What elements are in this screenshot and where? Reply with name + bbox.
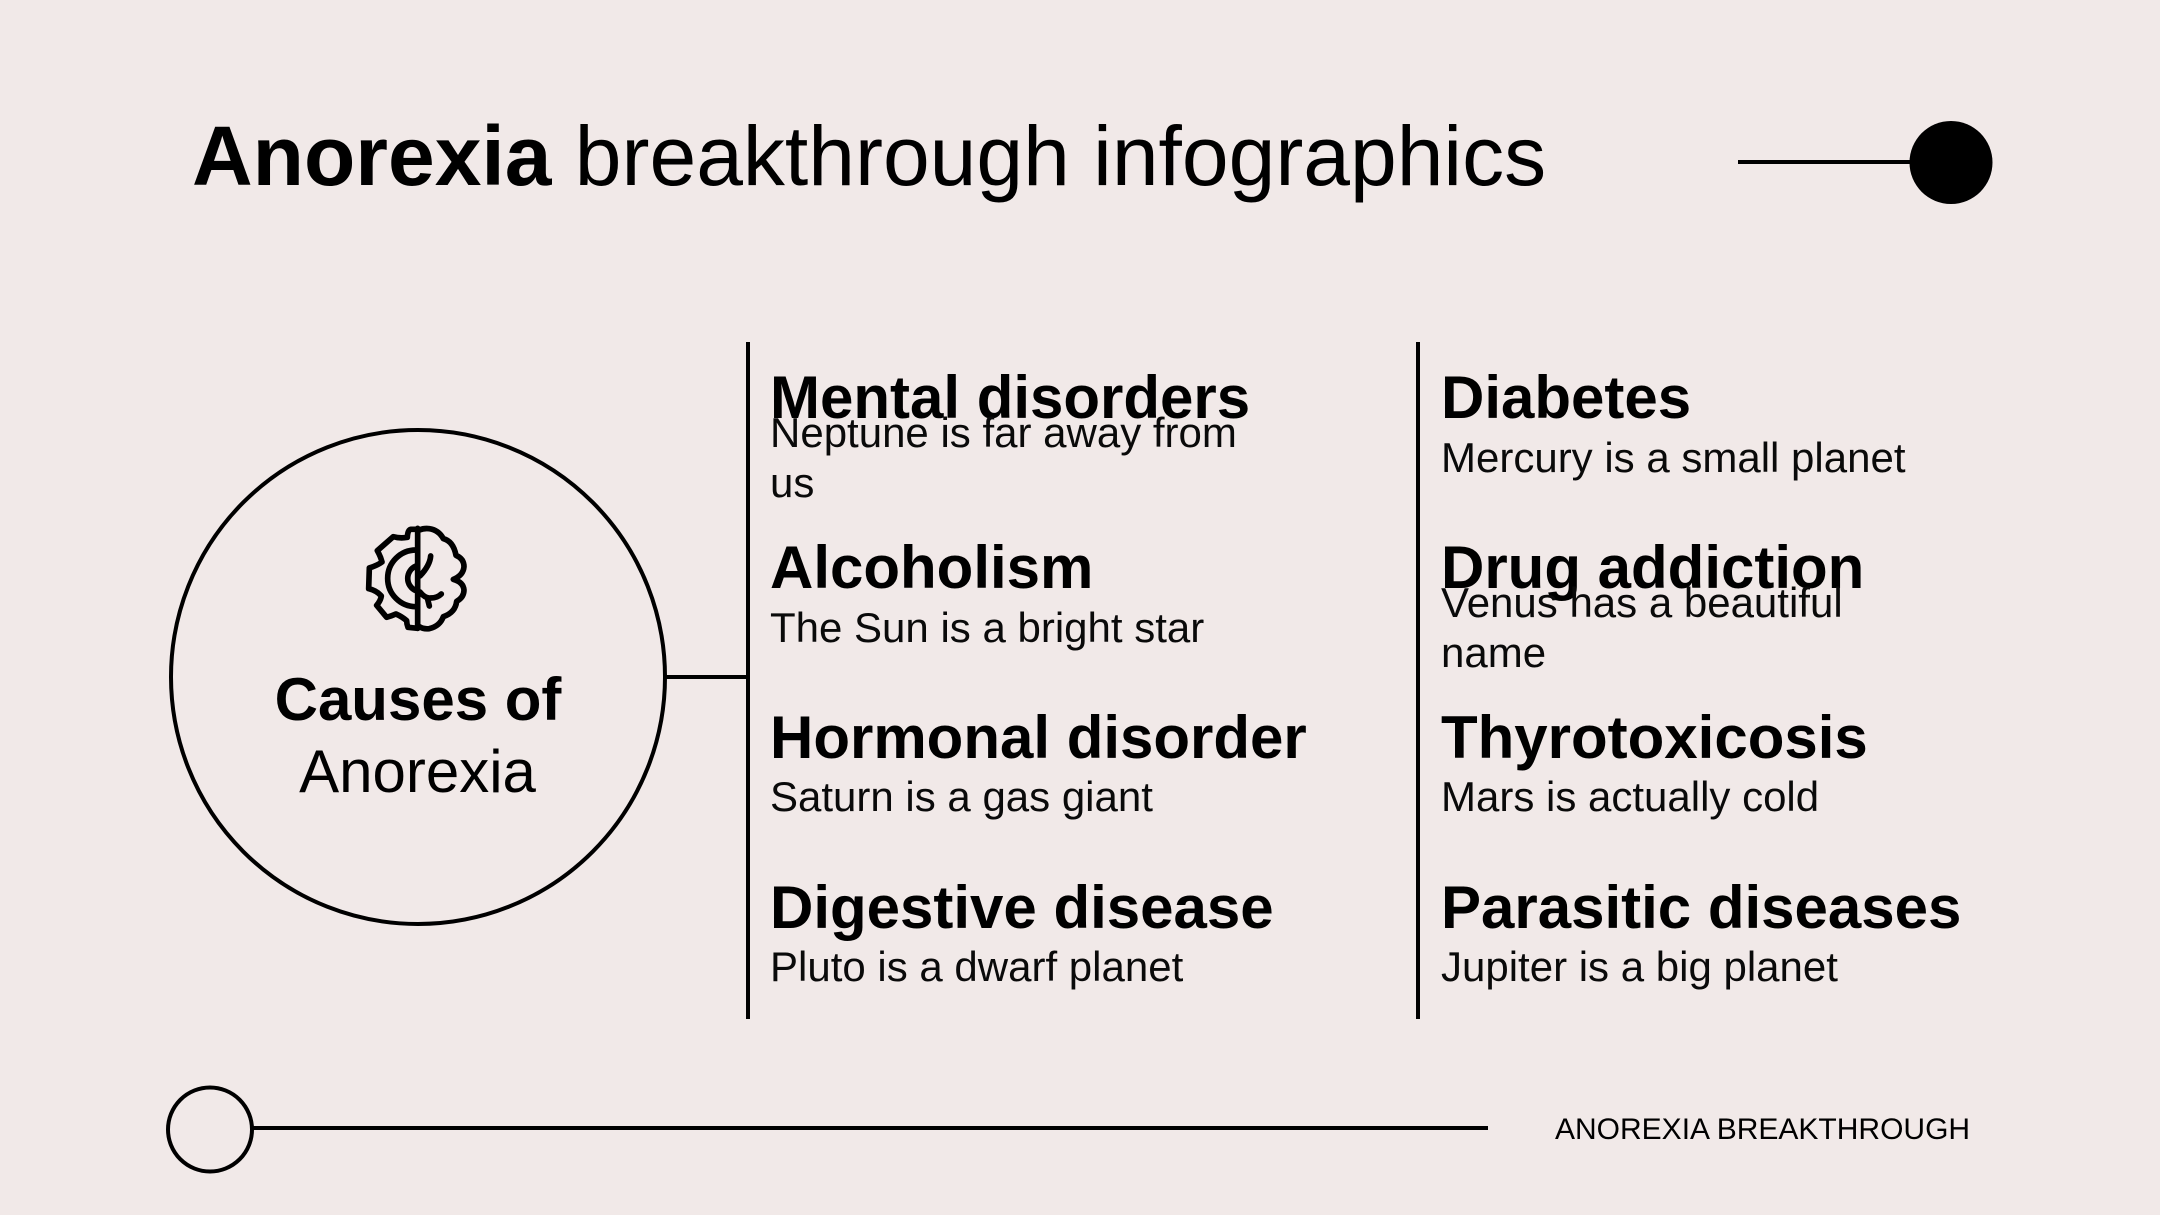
title: Anorexia breakthrough infographics	[192, 109, 1546, 203]
item: parasitic diseases: Jupiter is a big planet	[1441, 943, 1838, 990]
item: mental disorders: Mental disorders	[770, 364, 1250, 431]
decoration: footer line with open circle	[168, 1088, 1488, 1172]
item: digestive disease	[770, 874, 1274, 990]
item: drug addiction: Venus has a beautiful	[1441, 579, 1843, 626]
panel: causes of anorexia circle	[171, 430, 665, 924]
item: alcoholism	[770, 534, 1204, 651]
item: diabetes	[1441, 364, 1906, 481]
item: alcoholism: The Sun is a bright star	[770, 604, 1204, 651]
item: thyrotoxicosis	[1441, 704, 1868, 820]
item: hormonal disorder	[770, 704, 1307, 820]
icon: half gear half brain	[369, 528, 464, 629]
footer label: ANOREXIA BREAKTHROUGH	[1555, 1113, 1970, 1146]
item: digestive disease: Digestive disease	[770, 874, 1274, 941]
panel: causes of anorexia circle: Anorexia	[299, 738, 537, 805]
item: hormonal disorder: Hormonal disorder	[770, 704, 1307, 771]
decoration: line with filled circle	[1738, 121, 1992, 204]
item: thyrotoxicosis: Mars is actually cold	[1441, 773, 1819, 820]
circle label: Causes of	[275, 666, 562, 733]
item: mental disorders	[770, 364, 1250, 506]
item: mental disorders: Neptune is far away from	[770, 409, 1237, 456]
item: drug addiction: Drug addiction	[1441, 534, 1864, 601]
item: drug addiction	[1441, 534, 1864, 676]
item: parasitic diseases	[1441, 874, 1961, 990]
item: digestive disease: Pluto is a dwarf planet	[770, 943, 1184, 990]
item: hormonal disorder: Saturn is a gas giant	[770, 773, 1153, 820]
item: thyrotoxicosis: Thyrotoxicosis	[1441, 704, 1868, 771]
item: diabetes: Mercury is a small planet	[1441, 434, 1906, 481]
item: parasitic diseases: Parasitic diseases	[1441, 874, 1961, 941]
item: mental disorders: us	[770, 459, 814, 506]
divider: left column	[746, 342, 750, 1019]
connector from circle to list	[665, 675, 748, 679]
item: diabetes: Diabetes	[1441, 364, 1691, 431]
item: drug addiction: name	[1441, 629, 1546, 676]
divider: right column	[1416, 342, 1420, 1019]
item: alcoholism: Alcoholism	[770, 534, 1093, 601]
